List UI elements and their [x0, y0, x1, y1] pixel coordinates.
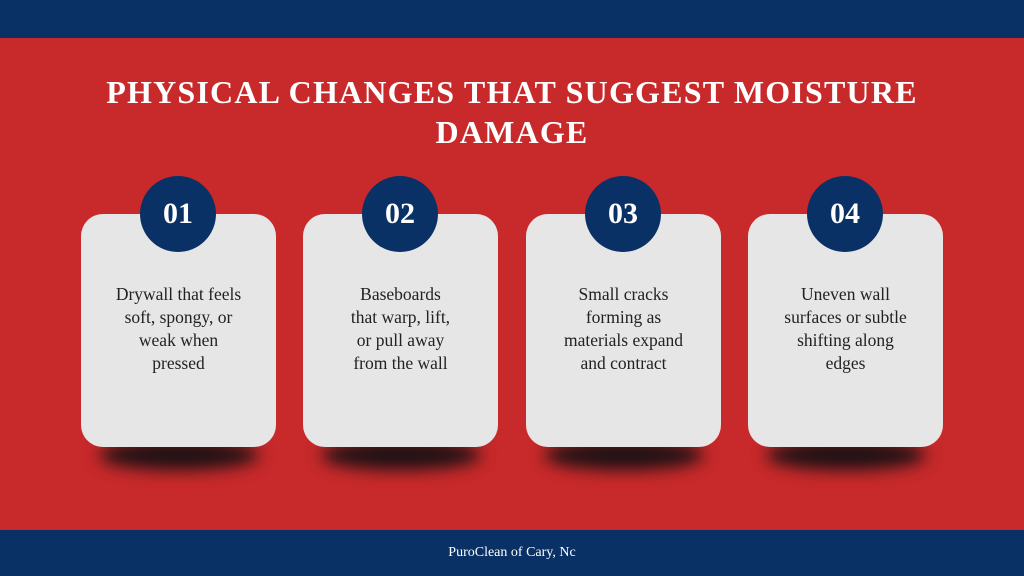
- text 4: [784, 284, 907, 373]
- card 3: [526, 176, 721, 483]
- text 1: pressed: [152, 353, 205, 373]
- text 2: that warp, lift,: [351, 307, 450, 327]
- text 1: Drywall that feels: [116, 284, 241, 304]
- badge 04: 04: [830, 197, 860, 230]
- footer: PuroClean of Cary, Nc: [448, 545, 576, 560]
- badge 01: 01: [163, 197, 193, 230]
- card 4: [748, 176, 943, 483]
- text 3: [564, 284, 683, 373]
- text 1: [116, 284, 241, 373]
- text 4: Uneven wall: [801, 284, 890, 304]
- title: PHYSICAL CHANGES THAT SUGGEST MOISTURE DAMAGE: [106, 74, 918, 150]
- text 3: and contract: [580, 353, 666, 373]
- text 3: materials expand: [564, 330, 683, 350]
- text 2: or pull away: [357, 330, 444, 350]
- badge 04: [807, 176, 883, 252]
- badge 02: [362, 176, 438, 252]
- badge 02: 02: [385, 197, 415, 230]
- top bar: [0, 0, 1024, 38]
- text 4: edges: [826, 353, 865, 373]
- card 2: [303, 176, 498, 483]
- badge 01: [140, 176, 216, 252]
- text 1: soft, spongy, or: [125, 307, 232, 327]
- text 2: [351, 284, 450, 373]
- text 4: surfaces or subtle: [784, 307, 907, 327]
- text 2: Baseboards: [360, 284, 441, 304]
- badge 03: 03: [608, 197, 638, 230]
- text 3: Small cracks: [579, 284, 668, 304]
- badge 03: [585, 176, 661, 252]
- text 4: shifting along: [797, 330, 894, 350]
- footer: [0, 530, 1024, 576]
- text 1: weak when: [139, 330, 218, 350]
- card 1: [81, 176, 276, 483]
- text 3: forming as: [586, 307, 661, 327]
- text 2: from the wall: [353, 353, 448, 373]
